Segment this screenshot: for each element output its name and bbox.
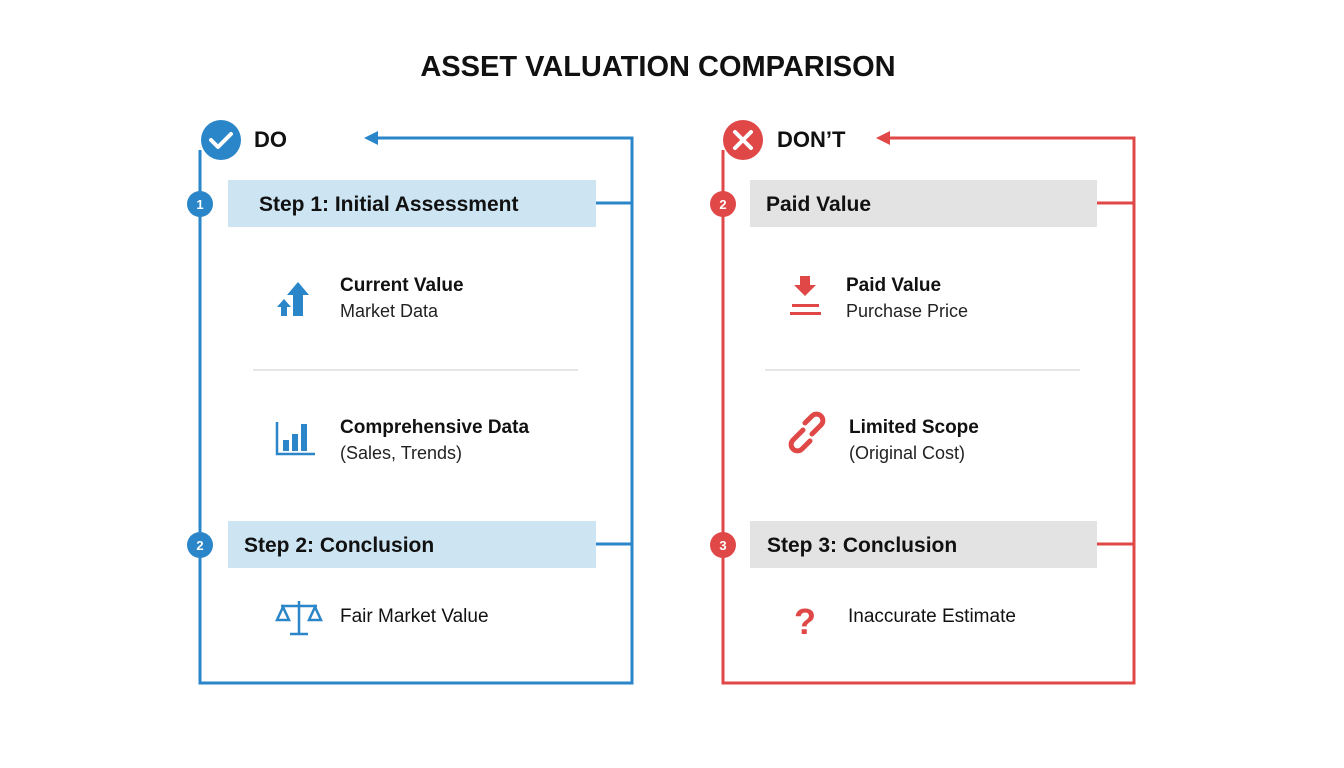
paid value header: 2 (719, 197, 727, 212)
paid value header (710, 180, 1134, 227)
item: limited scope: (Original Cost) (849, 443, 965, 463)
icon: cross (723, 120, 763, 160)
item: paid value: Purchase Price (846, 301, 968, 321)
step 3 header: Step 3: Conclusion (767, 534, 957, 557)
arrow: DO loop head (364, 131, 378, 145)
item: comprehensive data: Comprehensive Data (340, 417, 529, 438)
step 3 header: 3 (719, 538, 727, 553)
frame: DON'T loop (723, 138, 1134, 683)
paid value header: Paid Value (766, 193, 871, 216)
item: paid value: Paid Value (846, 275, 941, 296)
icon: check (201, 120, 241, 160)
step 1 header: 1 (196, 197, 204, 212)
item: current value: Market Data (340, 301, 439, 321)
heading: DON'T: DON’T (777, 127, 846, 152)
step 3 header (710, 521, 1134, 568)
item: inaccurate estimate: ? (794, 601, 816, 642)
item: current value: Current Value (340, 275, 464, 296)
step 1 header: Step 1: Initial Assessment (259, 193, 518, 216)
step 2 header (187, 521, 632, 568)
item: limited scope (791, 414, 979, 463)
frame: DO loop (200, 138, 632, 683)
arrow: DON'T loop head (876, 131, 890, 145)
item: comprehensive data: (Sales, Trends) (340, 443, 462, 463)
item: inaccurate estimate: Inaccurate Estimate (848, 606, 1016, 627)
step 2 header: 2 (196, 538, 204, 553)
heading: DO: DO (254, 127, 287, 152)
item: current value (277, 275, 464, 321)
item: paid value (790, 275, 968, 321)
step 1 header (187, 180, 632, 227)
title: ASSET VALUATION COMPARISON (420, 51, 896, 83)
item: comprehensive data (277, 417, 529, 463)
item: fair market value (277, 601, 489, 634)
panel: DON'T (710, 120, 1134, 683)
step 2 header: Step 2: Conclusion (244, 534, 434, 557)
item: fair market value: Fair Market Value (340, 606, 489, 627)
item: inaccurate estimate (794, 601, 1016, 642)
item: limited scope: Limited Scope (849, 417, 979, 438)
panel: DO (187, 120, 632, 683)
